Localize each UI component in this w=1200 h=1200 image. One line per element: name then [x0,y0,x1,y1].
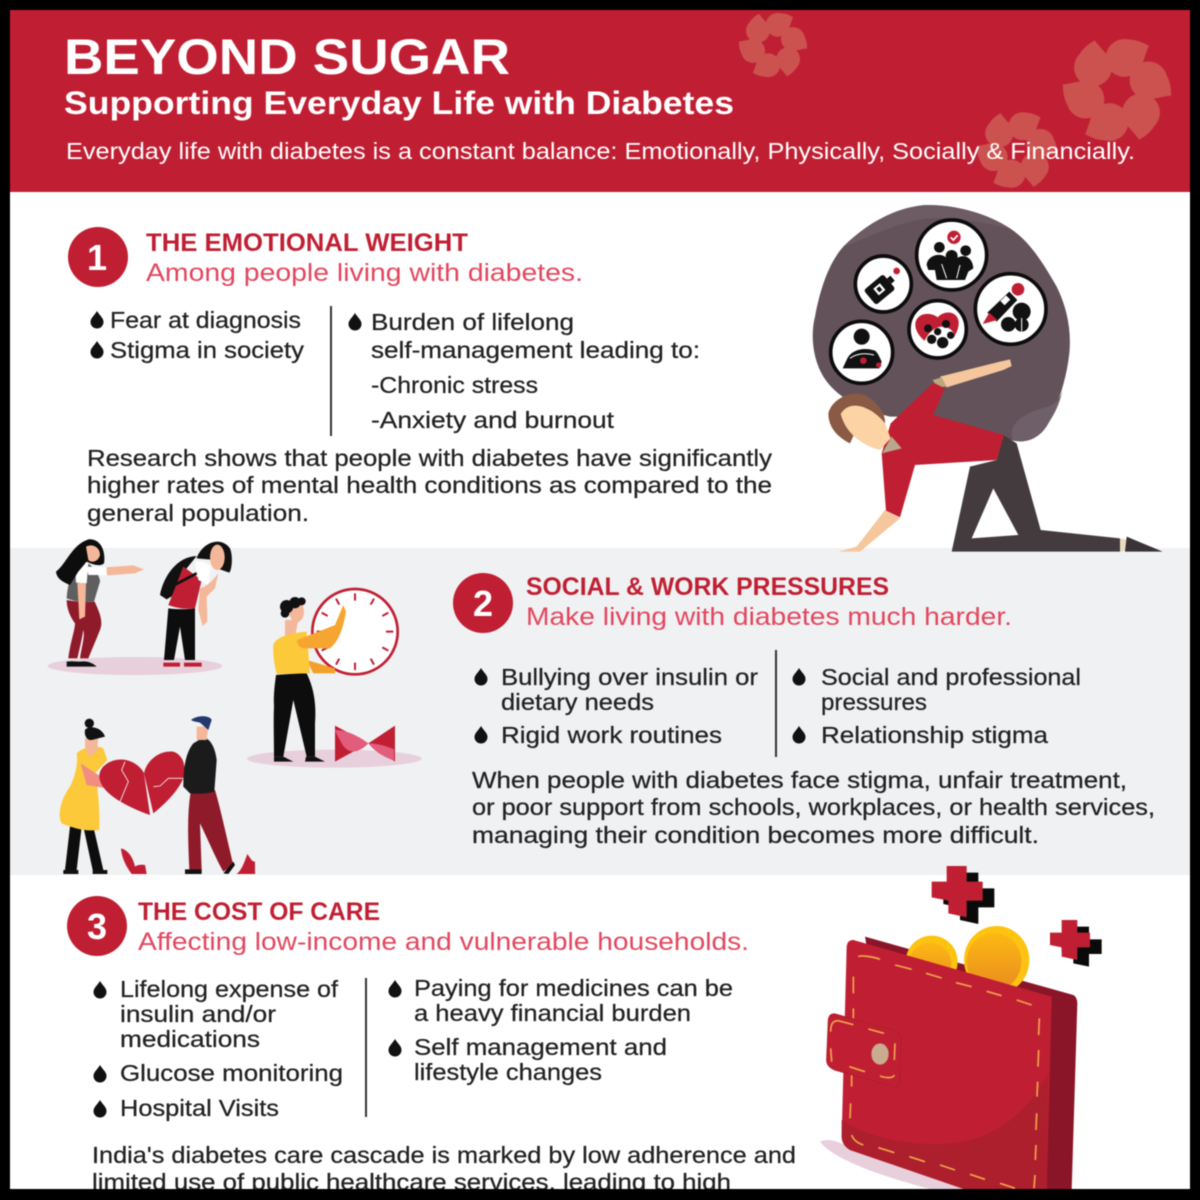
panel: the emotional weight [68,205,1163,552]
bullet list left: Hospital Visits [120,1095,279,1121]
stigma paragraph: When people with diabetes face stigma, unfair treatment, [472,767,1127,793]
icon: middle rosette [967,102,1067,198]
bullet list left: Stigma in society [110,337,305,363]
number badge 3: 3 [87,906,107,947]
panel: section 2 background band [10,548,1190,875]
panel: social and work pressures [48,539,1155,874]
number badge 2: 2 [473,583,493,624]
bullet list left: Rigid work routines [501,722,722,748]
bullet list right: Self management and [414,1034,667,1060]
bullet list right: Social and professional [821,664,1081,690]
cost paragraph: India's diabetes care cascade is marked by low adherence and [92,1142,796,1168]
bullet list right: Burden of lifelong [371,309,574,335]
wallet front [842,940,1052,1190]
heading 3: THE COST OF CARE [138,898,380,926]
man figure [828,359,1163,552]
bullet list right [792,664,1081,748]
wallet back panel [865,937,1077,1190]
research paragraph [87,445,773,526]
coins [906,926,1029,994]
research paragraph: higher rates of mental health conditions as compared to the [87,472,772,498]
icon: heart with people [909,301,966,358]
subheading 2: Make living with diabetes much harder. [526,603,1012,631]
icon: small medical cross [1050,920,1102,967]
icon: person at table [831,321,893,383]
number badge 1: 1 [87,237,107,278]
icon: large rosette [1050,25,1184,155]
cost paragraph [92,1142,796,1195]
title: BEYOND SUGAR [64,29,510,85]
bullet list left [90,307,305,363]
wallet clasp [827,1014,901,1087]
icon: large medical cross [932,866,994,924]
stigma paragraph [472,767,1155,848]
icon: insulin pen and pills [975,274,1046,344]
research paragraph: Research shows that people with diabetes have significantly [87,445,773,471]
icon: small rosette [731,4,815,86]
subheading 3: Affecting low-income and vulnerable households. [138,928,749,956]
panel: header banner [10,4,1190,198]
bullet list left: medications [120,1026,260,1052]
illustration: bullying scene [48,539,232,675]
icon: community with check [917,220,987,290]
bullet list right: self-management leading to: [371,337,700,363]
bullet list right [348,309,700,433]
research paragraph: general population. [87,500,309,526]
bullet list left [94,976,343,1121]
bullet list left: Glucose monitoring [120,1060,343,1086]
bullet list left: insulin and/or [120,1001,276,1027]
cost paragraph: limited use of public healthcare services, leading to high [92,1169,731,1195]
number badge 2 [453,573,513,633]
illustration: wallet with coins and medical crosses [820,866,1102,1190]
stigma paragraph: or poor support from schools, workplaces, or health services, [472,794,1155,820]
bullet list right: lifestyle changes [414,1059,602,1085]
bullet list left: Bullying over insulin or [501,664,758,690]
illustration: couple with broken heart [60,716,255,874]
bullet list right: a heavy financial burden [414,1000,691,1026]
tagline: Everyday life with diabetes is a constant balance: Emotionally, Physically, Socially & Financially. [66,138,1135,164]
heading 2: SOCIAL & WORK PRESSURES [526,573,889,601]
bullet list right: -Anxiety and burnout [371,407,615,433]
bullet list left: Fear at diagnosis [110,307,301,333]
bullet list left [474,664,758,748]
number badge 1 [68,227,128,287]
bullet list left: dietary needs [501,689,654,715]
bullet list right: Paying for medicines can be [414,975,733,1001]
embarrassed girl with backpack [160,542,232,667]
illustrations: social and work scenes [48,539,422,874]
subtitle: Supporting Everyday Life with Diabetes [64,85,734,121]
boulder [813,205,1070,441]
wallet shadow [820,1140,980,1190]
bullet list left: Lifelong expense of [120,976,339,1002]
bullet list right: pressures [821,689,927,715]
bullet list right: Relationship stigma [821,722,1048,748]
bullet list right [388,975,733,1085]
pointing girl [56,539,144,667]
number badge 3 [67,896,127,956]
icon: glucose meter [855,256,911,312]
bullet list right: -Chronic stress [371,372,538,398]
stigma paragraph: managing their condition becomes more difficult. [472,822,1039,848]
subheading 1: Among people living with diabetes. [146,259,583,287]
panel: the cost of care [67,866,1102,1195]
heading 1: THE EMOTIONAL WEIGHT [146,229,468,257]
illustration: man with clock and hourglass [247,589,422,768]
illustration: man carrying boulder of icons [813,205,1163,552]
